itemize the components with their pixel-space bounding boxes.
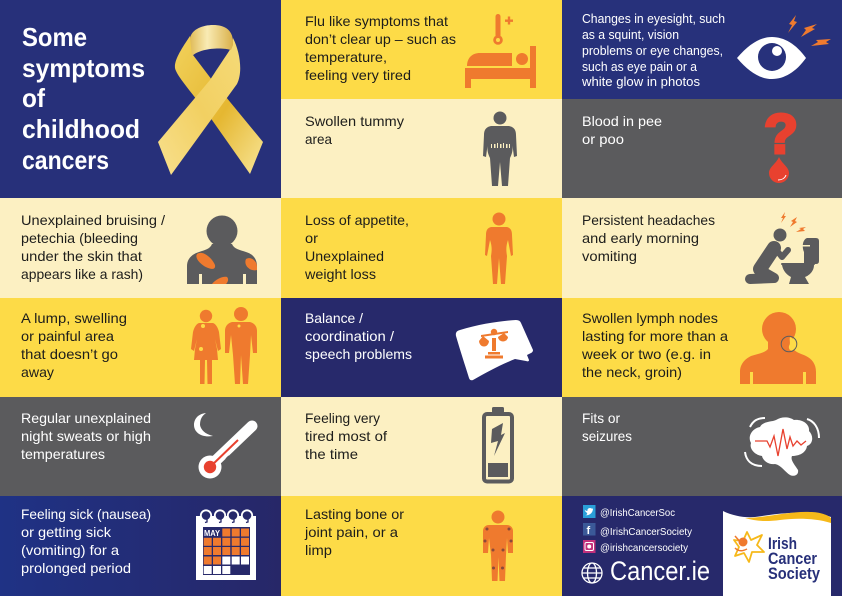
text: swollen tummy — [305, 113, 404, 147]
title — [22, 22, 145, 175]
text: feeling very tired: the time — [305, 446, 358, 462]
text: changes in eyesight: such as eye pain or a — [582, 59, 698, 74]
logo: Irish Cancer Society: Cancer — [768, 549, 817, 568]
icon: facebook — [583, 523, 596, 537]
icon: brain with seizure trace — [745, 417, 819, 476]
icon: instagram — [583, 540, 596, 553]
panel: night sweats — [0, 397, 281, 496]
text: swollen lymph nodes: lasting for more than a — [582, 328, 728, 344]
panel: balance and speech problems — [281, 298, 562, 397]
text: night sweats: Regular unexplained — [21, 410, 151, 426]
text: bruising: Unexplained bruising / — [21, 212, 165, 228]
text: blood in pee: or poo — [582, 131, 624, 147]
icon: facebook: f — [586, 525, 590, 537]
text: loss of appetite — [304, 212, 409, 282]
icon: thermometer and bed — [465, 14, 536, 88]
text: fits or seizures: seizures — [582, 428, 632, 444]
title: Some — [22, 22, 87, 52]
text: balance: speech problems — [305, 346, 412, 362]
title: cancers — [22, 145, 109, 175]
text: loss of appetite: or — [305, 230, 318, 246]
text: lump or swelling: away — [21, 364, 54, 380]
text: bruising: appears like a rash) — [21, 266, 143, 282]
panel: contact and logo — [562, 496, 842, 596]
panel: bruising — [0, 198, 281, 298]
icon: body with bruises — [187, 216, 257, 284]
text: bone or joint pain: Lasting bone or — [305, 506, 404, 522]
text: flu like symptoms: feeling very tired — [305, 67, 411, 83]
text: blood in pee: Blood in pee — [582, 113, 662, 129]
panel: changes in eyesight — [562, 0, 842, 99]
icon: twitter — [583, 505, 596, 518]
text: changes in eyesight: problems or eye changes, — [582, 43, 723, 58]
text: flu like symptoms: don’t clear up – such as — [305, 31, 456, 47]
logo: Irish Cancer Society: Society — [768, 564, 820, 583]
text: instagram handle: @irishcancersociety — [600, 542, 689, 554]
text: swollen lymph nodes: the neck, groin) — [582, 364, 682, 380]
panel: blood in pee or poo — [562, 99, 842, 198]
text: bone or joint pain: limp — [305, 542, 332, 558]
text: balance — [305, 310, 412, 362]
text: fits or seizures: Fits or — [582, 410, 620, 426]
panel: loss of appetite — [281, 198, 562, 298]
icon: man with swollen tummy — [483, 112, 517, 186]
text: bone or joint pain: joint pain, or a — [304, 524, 398, 540]
text: swollen tummy: area — [305, 131, 332, 147]
logo: Irish Cancer Society: Irish — [768, 534, 797, 553]
icon: low battery — [484, 407, 512, 482]
text: changes in eyesight — [581, 11, 725, 89]
icon: person vomiting at toilet — [750, 212, 819, 284]
text: feeling sick: Feeling sick (nausea) — [21, 506, 151, 522]
panel: title — [0, 0, 281, 198]
text: feeling sick: (vomiting) for a — [21, 542, 119, 558]
text: balance: coordination / — [305, 328, 394, 344]
text: loss of appetite: Loss of appetite, — [305, 212, 409, 228]
icon: calendar: MAY — [204, 529, 221, 538]
text: feeling very tired: tired most of — [305, 428, 387, 444]
panel: feeling sick — [0, 496, 281, 596]
panel: persistent headaches — [562, 198, 842, 298]
text: feeling sick: or getting sick — [21, 524, 112, 540]
text: lump or swelling — [21, 310, 127, 380]
logo: Irish Cancer Society — [723, 511, 831, 596]
panel: flu like symptoms — [281, 0, 562, 99]
text: fits or seizures — [582, 410, 632, 444]
text: persistent headaches — [582, 212, 715, 264]
text: bruising: petechia (bleeding — [21, 230, 138, 246]
text: changes in eyesight: Changes in eyesight, such — [582, 11, 725, 26]
text: night sweats — [21, 410, 151, 462]
text: lump or swelling: A lump, swelling — [21, 310, 127, 326]
text: flu like symptoms — [305, 13, 456, 83]
text: feeling sick — [21, 506, 151, 576]
text: facebook handle: @IrishCancerSociety — [600, 526, 693, 538]
icon: body with painful joints — [483, 510, 513, 581]
text: feeling sick: prolonged period — [21, 560, 131, 576]
panel: swollen lymph nodes — [562, 298, 842, 397]
text: persistent headaches: Persistent headaches — [582, 212, 715, 228]
text: twitter handle: @IrishCancerSoc — [600, 507, 675, 519]
icon: calendar — [196, 510, 256, 580]
icon: moon and thermometer — [194, 413, 254, 478]
text: changes in eyesight: as a squint, vision — [582, 27, 679, 42]
text: lump or swelling: that doesn’t go — [21, 346, 118, 362]
title: childhood — [22, 114, 140, 144]
text: swollen lymph nodes: Swollen lymph nodes — [582, 310, 718, 326]
text: blood in pee — [582, 113, 662, 147]
text: night sweats: night sweats or high — [21, 428, 151, 444]
text: changes in eyesight: white glow in photos — [581, 74, 700, 89]
text: bruising — [21, 212, 165, 282]
panel: fits or seizures — [562, 397, 842, 496]
icon: eye with pain bolts — [737, 15, 831, 79]
panel: feeling very tired — [281, 397, 562, 496]
text: persistent headaches: vomiting — [582, 248, 637, 264]
icon: woman and man with lumps — [191, 307, 257, 384]
panel: bone or joint pain — [281, 496, 562, 596]
icon: gold ribbon — [158, 25, 263, 175]
text: lump or swelling: or painful area — [21, 328, 114, 344]
text: feeling very tired: Feeling very — [305, 410, 380, 426]
text: bone or joint pain — [304, 506, 404, 558]
text: flu like symptoms: Flu like symptoms that — [305, 13, 448, 29]
icon: bust with swollen neck node — [740, 312, 816, 384]
icon: speech bubble with scales — [456, 320, 533, 380]
text: bruising: under the skin that — [21, 248, 142, 264]
text: night sweats: temperatures — [21, 446, 105, 462]
panel: swollen tummy — [281, 99, 562, 198]
text: feeling very tired — [305, 410, 387, 462]
text: swollen lymph nodes: week or two (e.g. in — [581, 346, 711, 362]
text: swollen tummy: Swollen tummy — [305, 113, 404, 129]
text: persistent headaches: and early morning — [582, 230, 699, 246]
icon: question mark and blood drop: ? — [764, 102, 798, 165]
title: symptoms — [22, 53, 145, 83]
text: swollen lymph nodes — [581, 310, 728, 380]
text: website: Cancer.ie — [610, 556, 710, 586]
title: of — [22, 83, 45, 113]
panel: lump or swelling — [0, 298, 281, 397]
text: balance: Balance / — [305, 310, 363, 326]
icon: thin person — [485, 212, 513, 284]
text: loss of appetite: weight loss — [304, 266, 376, 282]
text: loss of appetite: Unexplained — [305, 248, 384, 264]
icon: globe — [582, 563, 602, 583]
text: flu like symptoms: temperature, — [305, 49, 387, 65]
